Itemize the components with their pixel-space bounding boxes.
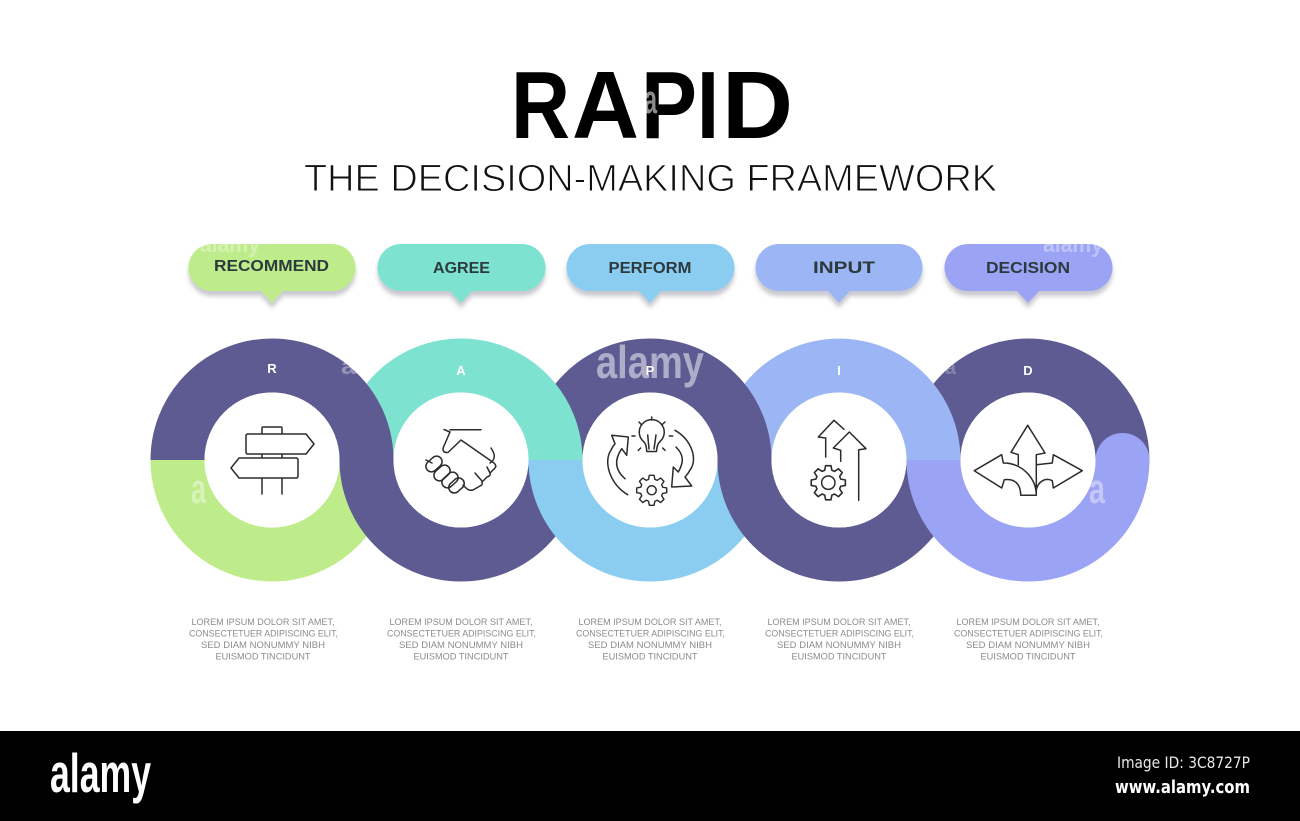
title: a <box>644 78 657 122</box>
watermark overlays: a <box>191 465 206 512</box>
title: I <box>697 52 719 159</box>
text: decision description: EUISMOD TINCIDUNT <box>980 652 1076 662</box>
title: D <box>722 52 793 159</box>
ring letters: D <box>1023 363 1033 378</box>
watermark overlays: a <box>341 353 356 379</box>
interlocking ring wave <box>178 366 1150 554</box>
label: decision: DECISION <box>986 260 1070 277</box>
title <box>511 52 793 159</box>
footer logo: alamy <box>50 742 151 804</box>
icon: idea cycle with gear <box>608 417 694 505</box>
label: decision <box>944 244 1112 303</box>
label: perform <box>566 244 734 303</box>
text: recommend description: SED DIAM NONUMMY NIBH <box>201 640 325 651</box>
watermark overlays: a <box>1089 465 1105 512</box>
text: agree description: CONSECTETUER ADIPISCING ELIT, <box>387 628 536 640</box>
footer url: www.alamy.com <box>1115 777 1250 798</box>
text: perform description: EUISMOD TINCIDUNT <box>602 652 698 662</box>
text: recommend description <box>189 617 338 662</box>
label: recommend: RECOMMEND <box>214 258 329 275</box>
label: agree <box>378 244 546 303</box>
title: R <box>511 52 570 159</box>
ring letters: A <box>456 363 466 378</box>
text: perform description: SED DIAM NONUMMY NIBH <box>588 640 712 651</box>
watermark overlays: alamy <box>1043 231 1104 258</box>
watermark overlays: alamy <box>596 336 704 388</box>
icon: handshake <box>424 430 496 495</box>
label: perform: PERFORM <box>608 260 692 277</box>
text: decision description: CONSECTETUER ADIPISCING ELIT, <box>954 628 1103 640</box>
label: input: INPUT <box>813 258 876 277</box>
text: recommend description: CONSECTETUER ADIPISCING ELIT, <box>189 628 338 640</box>
ring letters <box>267 361 1033 378</box>
text: perform description: LOREM IPSUM DOLOR SIT AMET, <box>578 617 722 628</box>
footer image id: Image ID: 3C8727P <box>1117 753 1250 772</box>
text: recommend description: LOREM IPSUM DOLOR SIT AMET, <box>192 617 334 628</box>
text: decision description: LOREM IPSUM DOLOR SIT AMET, <box>956 617 1100 628</box>
text: perform description <box>576 617 725 662</box>
text: input description: LOREM IPSUM DOLOR SIT AMET, <box>768 617 910 628</box>
title: A <box>572 52 639 159</box>
ring letters: R <box>267 361 277 376</box>
text: agree description: LOREM IPSUM DOLOR SIT AMET, <box>390 617 532 628</box>
footer band <box>0 731 1300 821</box>
title: P <box>641 52 697 159</box>
text: input description: EUISMOD TINCIDUNT <box>792 652 887 662</box>
icon: signpost <box>231 427 314 494</box>
label: input <box>755 244 922 303</box>
speech bubble labels <box>188 244 1112 303</box>
text: decision description <box>954 617 1103 662</box>
text: recommend description: EUISMOD TINCIDUNT <box>216 652 311 662</box>
label: agree: AGREE <box>433 260 490 277</box>
text: input description <box>765 617 914 662</box>
text: agree description: EUISMOD TINCIDUNT <box>414 652 509 662</box>
text: input description: SED DIAM NONUMMY NIBH <box>777 640 901 651</box>
text: agree description: SED DIAM NONUMMY NIBH <box>399 640 523 651</box>
text: decision description: SED DIAM NONUMMY NIBH <box>966 640 1090 651</box>
subtitle: THE DECISION-MAKING FRAMEWORK <box>304 158 997 200</box>
label: recommend <box>188 244 355 303</box>
ring letters: P <box>646 363 655 378</box>
icon: three way arrows <box>974 425 1082 495</box>
ring letters: I <box>837 363 841 378</box>
text: agree description <box>387 617 536 662</box>
watermark overlays: alamy <box>200 231 261 258</box>
watermark overlays: a <box>945 357 957 379</box>
text: perform description: CONSECTETUER ADIPISCING ELIT, <box>576 628 725 640</box>
text: input description: CONSECTETUER ADIPISCING ELIT, <box>765 628 914 640</box>
watermark overlays <box>191 231 1105 512</box>
icon: up arrows with gear <box>811 420 866 500</box>
